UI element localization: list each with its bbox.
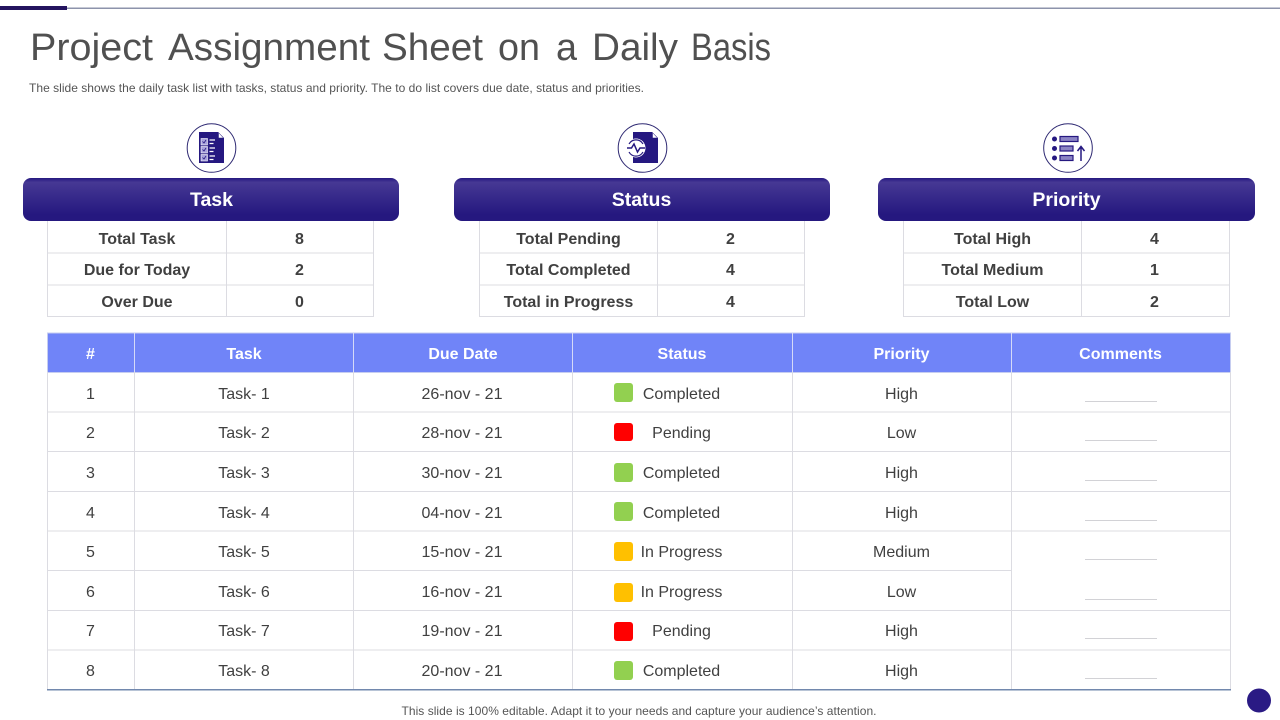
row 7: Task- 7 [218, 623, 270, 640]
row 5 [86, 542, 1157, 561]
table header [48, 333, 1230, 372]
table header: Status [658, 346, 707, 363]
table bottom border [47, 689, 1231, 690]
summary table: priority: 4 [1150, 231, 1159, 248]
title: Assignment [168, 27, 370, 69]
row 1: 1 [86, 386, 95, 403]
subtitle: The slide shows the daily task list with tasks, status and priority. The to do list covers due date, status and priorities. [29, 81, 644, 95]
summary table: task: 2 [295, 262, 304, 279]
title: on [498, 27, 540, 69]
header: status [454, 178, 830, 221]
row 4: High [885, 505, 918, 522]
row 2 [86, 423, 1157, 442]
summary table: task: Total Task [99, 231, 175, 248]
row 1: Task- 1 [218, 386, 270, 403]
row 3: Task- 3 [218, 465, 270, 482]
summary table: status [480, 221, 804, 316]
summary table: status: Total in Progress [504, 294, 633, 311]
page marker dot [1247, 688, 1271, 712]
icon: task checklist [187, 124, 236, 172]
header: priority: Priority [1032, 189, 1101, 211]
row 6: 6 [86, 584, 95, 601]
row 3: Completed [643, 465, 720, 482]
title: Project [30, 27, 153, 69]
summary table: task: 8 [295, 231, 304, 248]
summary table: task: Due for Today [84, 262, 190, 279]
summary table: priority: 1 [1150, 262, 1159, 279]
panel: task [23, 124, 399, 316]
title: Daily [592, 27, 678, 69]
row 4: 04-nov - 21 [422, 505, 503, 522]
row 5: Task- 5 [218, 544, 270, 561]
table grid [48, 372, 1230, 689]
row 4: Completed [643, 505, 720, 522]
row 2: Pending [652, 425, 711, 442]
table header: # [86, 346, 95, 363]
top rule [0, 6, 1280, 10]
summary table: task [48, 221, 374, 316]
title [30, 27, 771, 69]
row 5: Medium [873, 544, 930, 561]
summary table: task: 0 [295, 294, 304, 311]
row 3: 3 [86, 465, 95, 482]
row 6: Task- 6 [218, 584, 270, 601]
row 1: Completed [643, 386, 720, 403]
panel: status [454, 124, 830, 316]
row 3: High [885, 465, 918, 482]
row 8 [86, 661, 1157, 680]
main task table [47, 333, 1231, 690]
table header: Priority [873, 346, 930, 363]
row 3 [86, 463, 1157, 482]
row 6: Low [887, 584, 917, 601]
row 7: 7 [86, 623, 95, 640]
row 4: 4 [86, 505, 95, 522]
header: task [23, 178, 399, 221]
row 6: In Progress [641, 584, 722, 601]
row 6 [86, 583, 1157, 602]
row 8: Task- 8 [218, 663, 270, 680]
summary table: priority: Total High [954, 231, 1031, 248]
header: priority [878, 178, 1255, 221]
row 8: 8 [86, 663, 95, 680]
row 7: High [885, 623, 918, 640]
summary table: priority: Total Low [956, 294, 1030, 311]
row 8: Completed [643, 663, 720, 680]
row 4 [86, 502, 1157, 522]
row 3: 30-nov - 21 [422, 465, 503, 482]
table header: Comments [1079, 346, 1162, 363]
row 2: 28-nov - 21 [422, 425, 503, 442]
row 7: 19-nov - 21 [422, 623, 503, 640]
title: Sheet [382, 27, 483, 69]
row 5: 5 [86, 544, 95, 561]
summary table: status: 4 [726, 262, 735, 279]
row 8: High [885, 663, 918, 680]
row 4: Task- 4 [218, 505, 270, 522]
row 5: 15-nov - 21 [422, 544, 503, 561]
row 1: High [885, 386, 918, 403]
footer note: This slide is 100% editable. Adapt it to your needs and capture your audience’s attention. [402, 704, 876, 718]
summary table: status: Total Completed [506, 262, 631, 279]
row 6: 16-nov - 21 [422, 584, 503, 601]
summary table: priority: 2 [1150, 294, 1159, 311]
summary table: status: Total Pending [516, 231, 621, 248]
header: task: Task [190, 189, 233, 211]
summary table: status: 4 [726, 294, 735, 311]
header: status: Status [612, 189, 671, 211]
row 2: Task- 2 [218, 425, 270, 442]
row 7: Pending [652, 623, 711, 640]
row 8: 20-nov - 21 [422, 663, 503, 680]
row 5: In Progress [641, 544, 722, 561]
icon: status document [618, 124, 667, 172]
table header: Due Date [428, 346, 498, 363]
row 2: Low [887, 425, 917, 442]
row 1 [86, 383, 1157, 403]
summary table: priority: Total Medium [942, 262, 1043, 279]
title: Basis [691, 27, 771, 69]
icon: priority list [1044, 124, 1092, 172]
panel: priority [878, 124, 1255, 316]
table header: Task [226, 346, 262, 363]
summary table: task: Over Due [101, 294, 173, 311]
summary table: status: 2 [726, 231, 735, 248]
title: a [556, 27, 578, 69]
row 2: 2 [86, 425, 95, 442]
row 7 [86, 622, 1157, 641]
row 1: 26-nov - 21 [422, 386, 503, 403]
summary table: priority [904, 221, 1230, 316]
